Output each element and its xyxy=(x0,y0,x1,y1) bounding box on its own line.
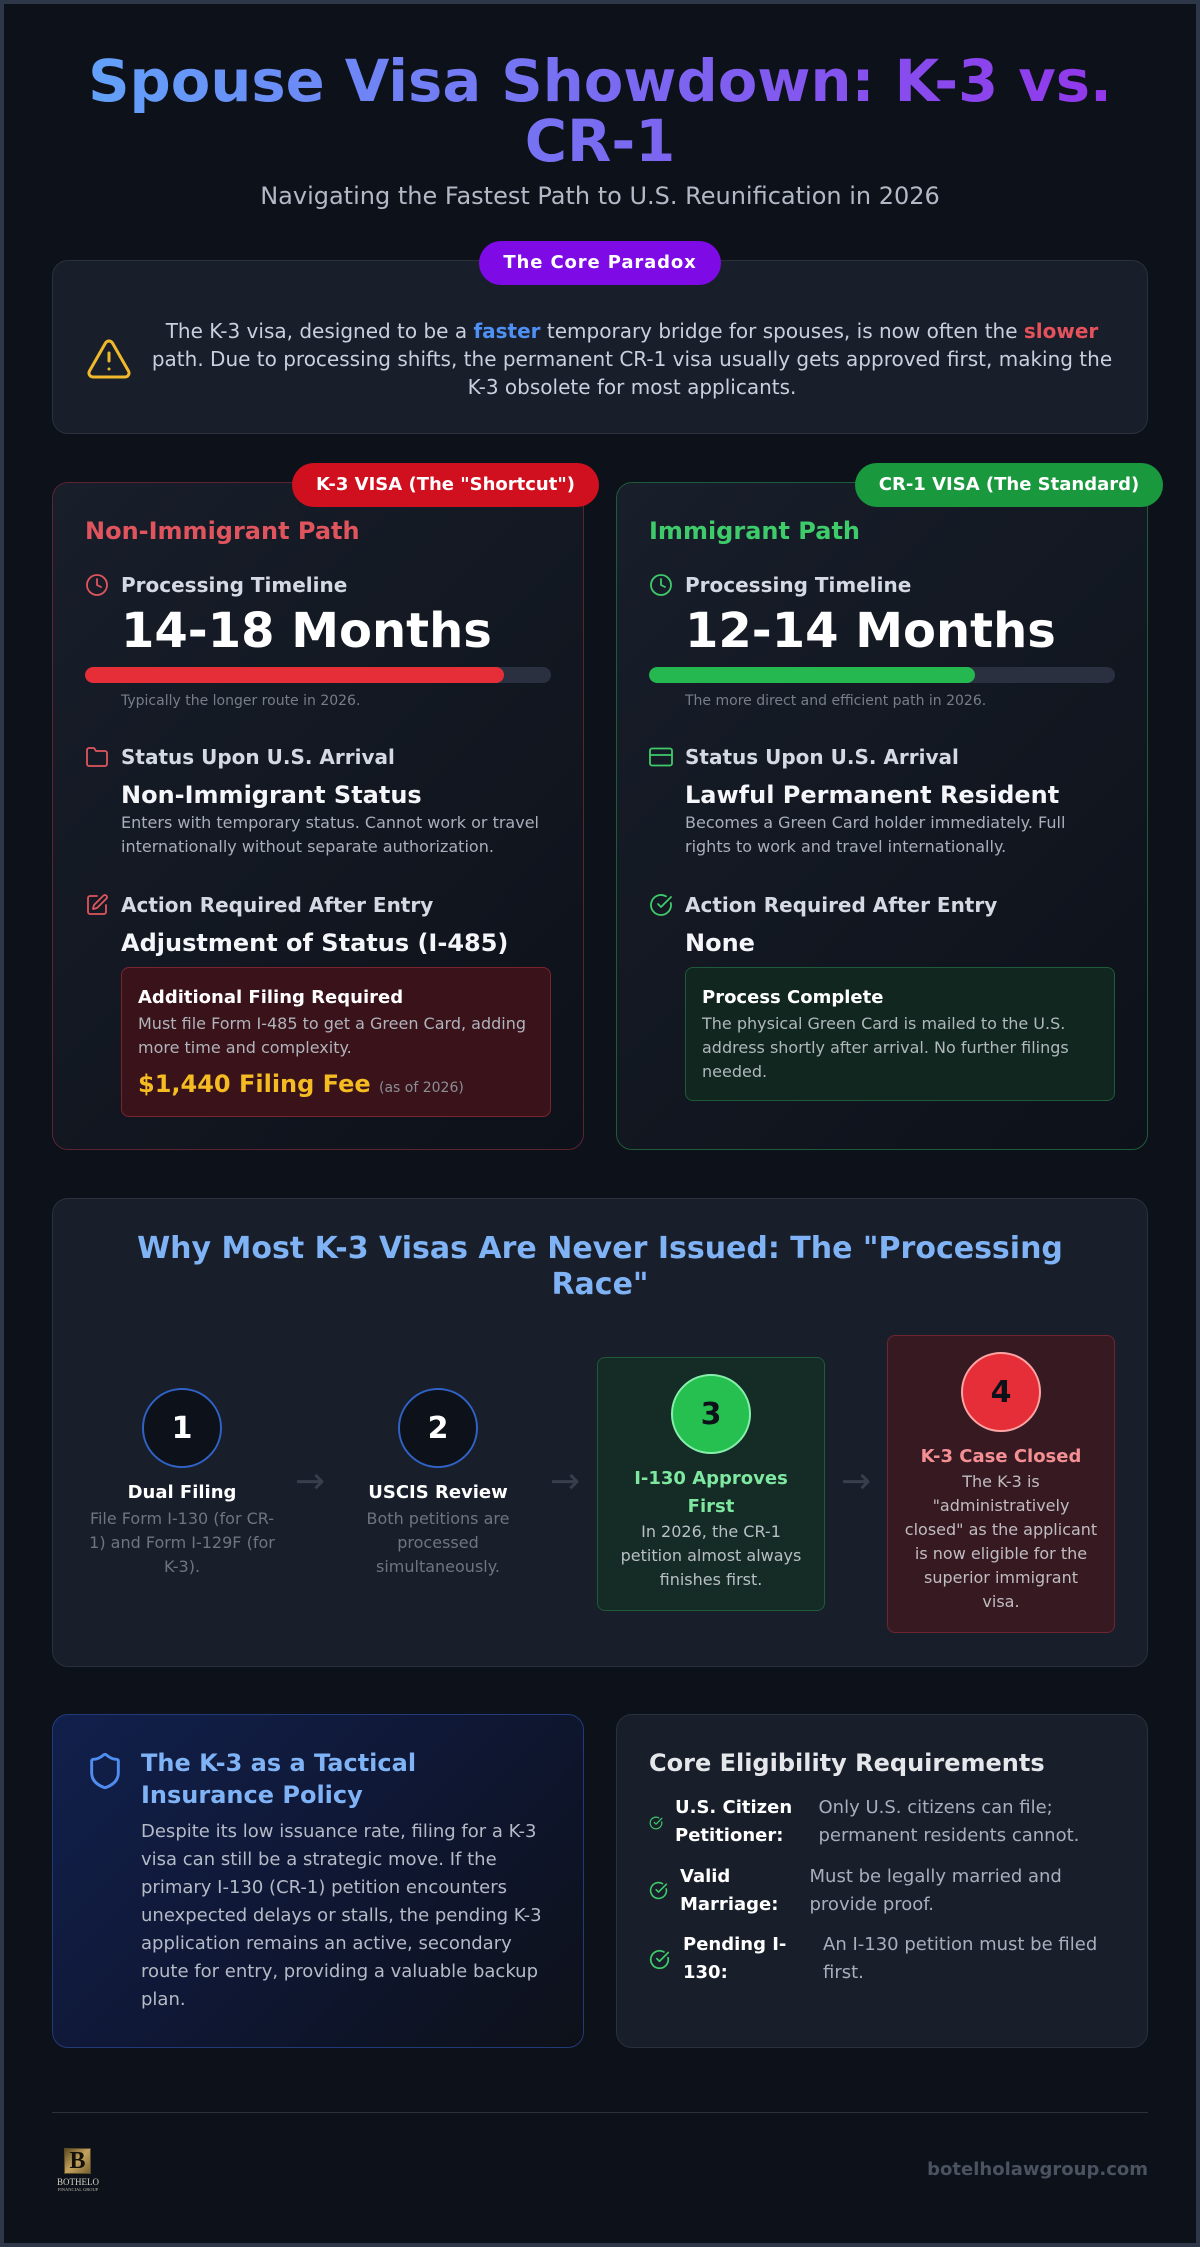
step 2 text: Both petitions are xyxy=(367,1509,509,1528)
step 3 box xyxy=(597,1357,825,1611)
panel: eligibility xyxy=(616,1714,1148,2048)
callout heading: Process Complete xyxy=(702,987,883,1008)
core paradox text: K-3 obsolete for most applicants. xyxy=(468,375,796,399)
step 3 text: petition almost always xyxy=(621,1546,801,1565)
step 3 text xyxy=(621,1522,801,1589)
step 3 circle xyxy=(671,1374,751,1454)
arrow 1: → xyxy=(295,1461,325,1502)
CR-1 heading: Immigrant Path xyxy=(649,517,860,545)
step 2 text xyxy=(367,1509,509,1576)
requirement 3 text: first. xyxy=(823,1962,864,1983)
requirement 1 text: permanent residents cannot. xyxy=(818,1825,1079,1846)
panel: tactical insurance xyxy=(52,1714,584,2048)
requirement 2 text: Must be legally married and xyxy=(810,1866,1062,1887)
step 3 title: I-130 Approves xyxy=(634,1468,788,1489)
title xyxy=(52,52,1148,172)
requirement 3 label: 130: xyxy=(683,1962,728,1983)
logo xyxy=(57,2148,99,2192)
K-3 status description: internationally without separate authorization. xyxy=(121,837,494,856)
step 1 text: 1) and Form I-129F (for xyxy=(89,1533,275,1552)
processing race heading xyxy=(137,1231,1063,1302)
icon: check circle xyxy=(650,894,672,916)
CR-1 timeline value: 12-14 Months xyxy=(685,603,1056,659)
badge: K-3 visa xyxy=(292,463,599,507)
K-3 heading: Non-Immigrant Path xyxy=(85,517,360,545)
step 2 circle: 2 xyxy=(428,1410,448,1446)
icon: warning triangle xyxy=(87,340,130,378)
step 1 text: K-3). xyxy=(164,1557,200,1576)
requirement 2 text xyxy=(810,1866,1062,1915)
core paradox text: The K-3 visa, designed to be a faster temporary bridge for spouses, is now often the slower xyxy=(166,319,1098,343)
step 4 text: is now eligible for the xyxy=(915,1544,1087,1563)
callout text: needed. xyxy=(702,1062,767,1081)
processing race heading: Why Most K-3 Visas Are Never Issued: The "Processing xyxy=(137,1231,1063,1266)
requirement 2 text: provide proof. xyxy=(810,1894,934,1915)
panel: CR-1 visa xyxy=(616,482,1148,1150)
K-3 timeline note: Typically the longer route in 2026. xyxy=(121,693,360,709)
panel: K-3 visa xyxy=(52,482,584,1150)
core paradox text: path. Due to processing shifts, the permanent CR-1 visa usually gets approved first, making the xyxy=(152,347,1112,371)
K-3 status description xyxy=(121,813,539,856)
step 4 text: superior immigrant xyxy=(924,1568,1078,1587)
K-3 timeline label: Processing Timeline xyxy=(121,573,347,597)
requirement 3 label xyxy=(683,1934,786,1983)
badge: CR-1 visa xyxy=(855,463,1163,507)
step 4 text xyxy=(905,1472,1097,1611)
requirement 1 text: Only U.S. citizens can file; xyxy=(818,1797,1053,1818)
step 4 text: visa. xyxy=(982,1592,1020,1611)
icon: check 1 xyxy=(650,1816,662,1830)
tactical text: plan. xyxy=(141,1989,186,2010)
CR-1 timeline label: Processing Timeline xyxy=(685,573,911,597)
step 2 text: simultaneously. xyxy=(376,1557,500,1576)
requirement 2 label xyxy=(680,1866,778,1915)
badge: the core paradox xyxy=(479,241,721,285)
step 2 text: processed xyxy=(397,1533,479,1552)
step 2 circle xyxy=(398,1388,478,1468)
logo: B xyxy=(69,2148,86,2174)
step 2 title: USCIS Review xyxy=(368,1482,508,1503)
callout text xyxy=(702,1014,1069,1081)
step 4 text: closed" as the applicant xyxy=(905,1520,1097,1539)
step 1 text: File Form I-130 (for CR- xyxy=(90,1509,274,1528)
CR-1 status description xyxy=(685,813,1065,856)
tactical text: Despite its low issuance rate, filing for a K-3 xyxy=(141,1821,536,1842)
K-3 action value: Adjustment of Status (I-485) xyxy=(121,929,508,957)
step 1 circle xyxy=(142,1388,222,1468)
step 3 circle: 3 xyxy=(701,1396,721,1432)
step 3 text: In 2026, the CR-1 xyxy=(641,1522,781,1541)
icon: clock xyxy=(86,574,108,596)
title: Spouse Visa Showdown: K-3 vs. xyxy=(88,48,1112,115)
icon: clock xyxy=(650,574,672,596)
tactical heading: Insurance Policy xyxy=(141,1781,363,1809)
requirement 1 label xyxy=(675,1797,792,1846)
requirement 2 label: Marriage: xyxy=(680,1894,778,1915)
requirement 3 label: Pending I- xyxy=(683,1934,786,1955)
callout text: address shortly after arrival. No further filings xyxy=(702,1038,1069,1057)
step 1 title: Dual Filing xyxy=(128,1482,236,1503)
arrow 2: → xyxy=(550,1461,580,1502)
CR-1 timeline note: The more direct and efficient path in 2026. xyxy=(685,693,986,709)
step 4 box xyxy=(887,1335,1115,1633)
K-3 status value: Non-Immigrant Status xyxy=(121,781,422,809)
icon: check 2 xyxy=(650,1882,668,1900)
tactical text: visa can still be a strategic move. If the xyxy=(141,1849,497,1870)
CR-1 status description: rights to work and travel internationally. xyxy=(685,837,1006,856)
step 3 title xyxy=(634,1468,788,1517)
requirement 3 text xyxy=(823,1934,1097,1983)
website: botelholawgroup.com xyxy=(927,2159,1148,2180)
icon: credit card xyxy=(649,748,673,766)
icon: shield xyxy=(90,1752,120,1790)
callout: process complete xyxy=(685,967,1115,1101)
eligibility heading: Core Eligibility Requirements xyxy=(649,1749,1045,1777)
badge: K-3 visa: K-3 VISA (The "Shortcut") xyxy=(316,474,575,494)
icon: pen xyxy=(87,894,108,915)
step 3 text: finishes first. xyxy=(660,1570,762,1589)
footer divider xyxy=(52,2112,1148,2113)
title: CR-1 xyxy=(525,108,675,175)
panel: processing race xyxy=(52,1198,1148,1667)
callout text xyxy=(138,1014,526,1057)
tactical text: application remains an active, secondary xyxy=(141,1933,512,1954)
callout heading: Additional Filing Required xyxy=(138,987,403,1008)
tactical heading xyxy=(141,1749,416,1809)
step 4 circle: 4 xyxy=(991,1374,1011,1410)
tactical text xyxy=(141,1821,542,2010)
K-3 progress bar xyxy=(85,667,551,683)
CR-1 status value: Lawful Permanent Resident xyxy=(685,781,1059,809)
step 1 circle: 1 xyxy=(172,1410,192,1446)
requirement 1 label: Petitioner: xyxy=(675,1825,783,1846)
step 3 title: First xyxy=(688,1496,734,1517)
K-3 status label: Status Upon U.S. Arrival xyxy=(121,745,395,769)
logo: FINANCIAL GROUP xyxy=(58,2187,98,2192)
requirement 3 text: An I-130 petition must be filed xyxy=(823,1934,1097,1955)
panel: core paradox xyxy=(52,260,1148,434)
K-3 status description: Enters with temporary status. Cannot work or travel xyxy=(121,813,539,832)
tactical text: route for entry, providing a valuable backup xyxy=(141,1961,538,1982)
CR-1 action value: None xyxy=(685,929,755,957)
badge: CR-1 visa: CR-1 VISA (The Standard) xyxy=(879,474,1139,494)
icon: check 3 xyxy=(650,1950,670,1970)
callout text: more time and complexity. xyxy=(138,1038,352,1057)
K-3 action label: Action Required After Entry xyxy=(121,893,433,917)
CR-1 progress bar xyxy=(649,667,1115,683)
step 4 text: The K-3 is xyxy=(962,1472,1040,1491)
K-3 timeline value: 14-18 Months xyxy=(121,603,492,659)
logo: BOTHELO xyxy=(57,2177,99,2187)
tactical heading: The K-3 as a Tactical xyxy=(141,1749,416,1777)
step 4 circle xyxy=(961,1352,1041,1432)
core paradox text xyxy=(152,319,1112,399)
arrow 3: → xyxy=(841,1461,871,1502)
CR-1 action label: Action Required After Entry xyxy=(685,893,997,917)
CR-1 status description: Becomes a Green Card holder immediately. Full xyxy=(685,813,1065,832)
callout text: The physical Green Card is mailed to the U.S. xyxy=(702,1014,1065,1033)
requirement 1 text xyxy=(818,1797,1079,1846)
processing race heading: Race" xyxy=(551,1267,649,1302)
badge: the core paradox: The Core Paradox xyxy=(503,252,697,272)
subtitle: Navigating the Fastest Path to U.S. Reunification in 2026 xyxy=(260,182,940,210)
filing fee: $1,440 Filing Fee (as of 2026) xyxy=(138,1070,464,1098)
icon: folder xyxy=(86,747,108,767)
step 4 title: K-3 Case Closed xyxy=(921,1446,1081,1467)
CR-1 status label: Status Upon U.S. Arrival xyxy=(685,745,959,769)
tactical text: unexpected delays or stalls, the pending K-3 xyxy=(141,1905,542,1926)
callout text: Must file Form I-485 to get a Green Card, adding xyxy=(138,1014,526,1033)
requirement 2 label: Valid xyxy=(680,1866,730,1887)
step 4 text: "administratively xyxy=(933,1496,1069,1515)
tactical text: primary I-130 (CR-1) petition encounters xyxy=(141,1877,507,1898)
step 1 text xyxy=(89,1509,275,1576)
callout: additional filing xyxy=(121,967,551,1117)
requirement 1 label: U.S. Citizen xyxy=(675,1797,792,1818)
